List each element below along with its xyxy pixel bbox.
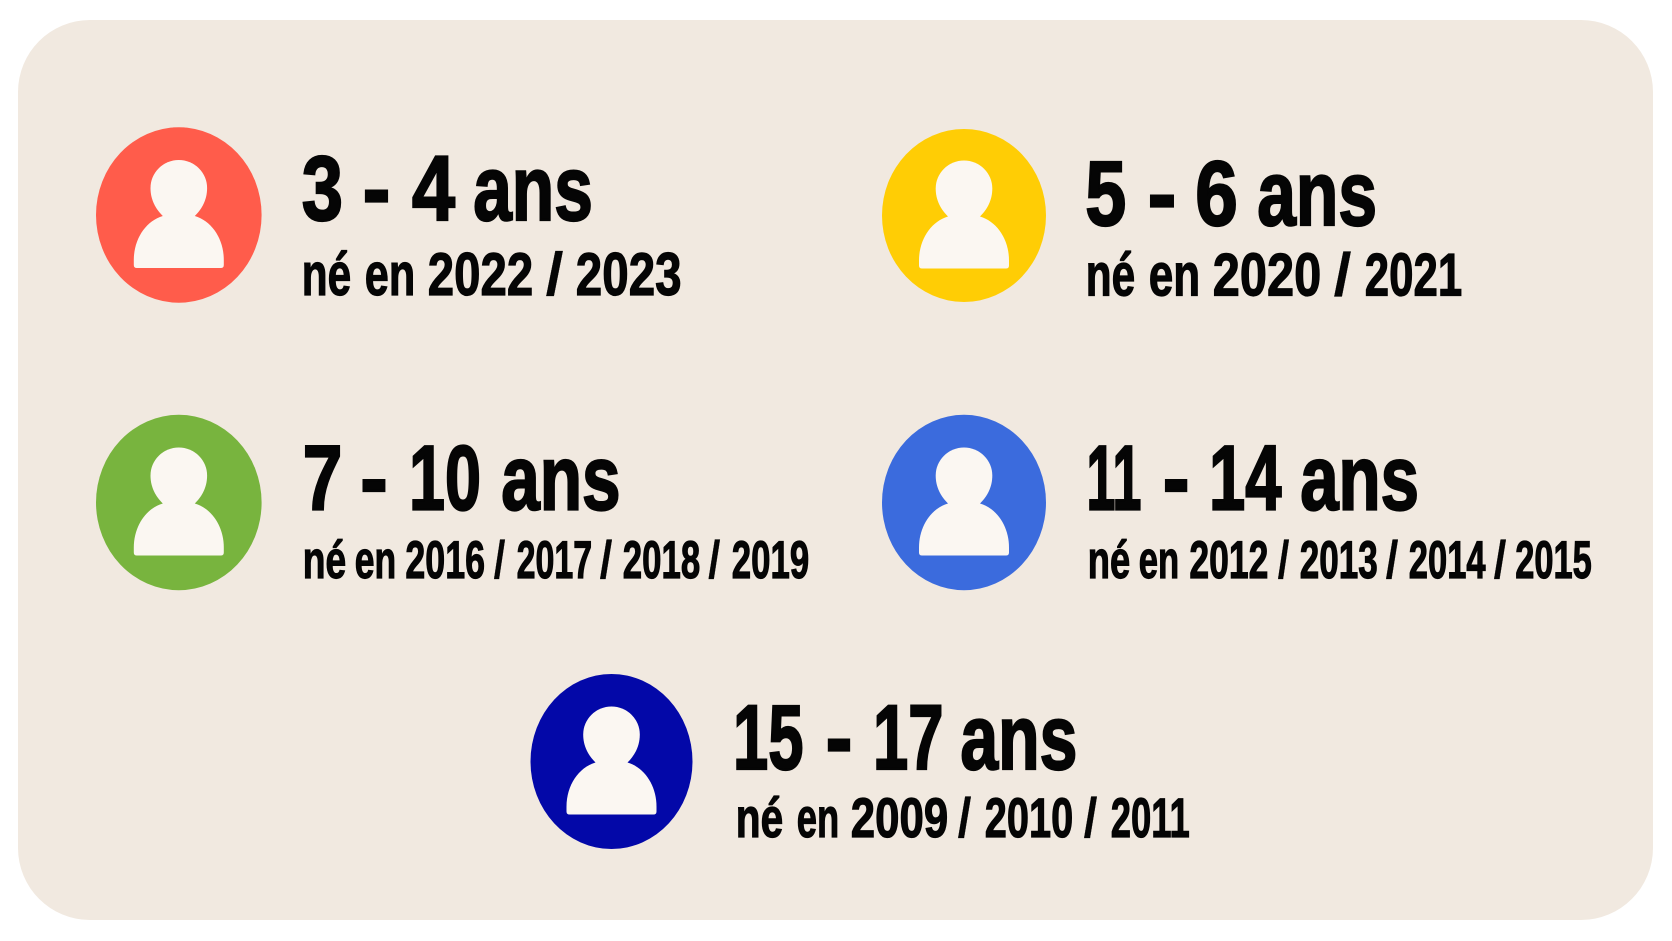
text: birth years: 2019 — [732, 531, 809, 590]
heading: age range: - — [1163, 428, 1190, 530]
heading: age range — [1085, 143, 1377, 245]
icon: navy person avatar — [530, 674, 692, 849]
text: birth years: 2015 — [1515, 531, 1592, 590]
text: birth years: en — [355, 531, 396, 590]
text: birth years: 2020 — [1213, 242, 1321, 308]
text: birth years: en — [797, 786, 839, 849]
icon: red person avatar — [96, 127, 262, 303]
text: birth years: en — [1139, 531, 1179, 590]
text: birth years: 2010 — [985, 786, 1073, 849]
heading: age range: 4 — [412, 138, 455, 240]
text: birth years: 2013 — [1300, 531, 1378, 590]
heading: age range: ans — [1300, 428, 1419, 530]
icon: green person avatar — [96, 415, 262, 590]
text: birth years: / — [708, 531, 721, 590]
text: birth years — [736, 786, 1190, 849]
text: birth years: / — [546, 241, 564, 308]
text: birth years: / — [1278, 531, 1290, 590]
heading: age range: 7 — [303, 428, 342, 530]
text: birth years: 2016 — [405, 531, 485, 590]
icon: blue person avatar — [882, 415, 1046, 590]
group: 7 - 10 ans — [96, 415, 809, 590]
text: birth years — [1086, 242, 1462, 308]
heading: age range: ans — [960, 687, 1077, 789]
heading: age range: ans — [473, 138, 593, 240]
text: birth years: / — [1494, 531, 1507, 590]
text: birth years: / — [600, 531, 613, 590]
heading: age range — [302, 138, 593, 240]
heading: age range: 17 — [873, 687, 944, 789]
text: birth years: 2018 — [623, 531, 700, 590]
group: 15 - 17 ans — [530, 674, 1190, 849]
heading: age range: - — [826, 687, 852, 789]
heading: age range: ans — [501, 428, 621, 530]
heading: age range: - — [360, 428, 388, 530]
heading: age range: 3 — [302, 138, 343, 240]
heading: age range: 14 — [1209, 428, 1282, 530]
heading: age range: - — [1148, 143, 1176, 245]
heading: age range: 5 — [1085, 143, 1126, 245]
heading: age range: 10 — [409, 428, 481, 530]
text: birth years: né — [736, 786, 783, 849]
heading: age range: 15 — [733, 687, 804, 789]
text: birth years: né — [302, 241, 351, 308]
heading: age range: ans — [1257, 143, 1377, 245]
heading: age range: 6 — [1195, 143, 1238, 245]
text: birth years: né — [1088, 531, 1130, 590]
heading: age range: - — [363, 138, 390, 240]
text: birth years: 2009 — [851, 786, 948, 849]
text: birth years: 2017 — [517, 531, 592, 590]
text: birth years: / — [494, 531, 506, 590]
group: 11 - 14 ans — [882, 415, 1592, 590]
heading: age range — [303, 428, 621, 530]
text: birth years: / — [1084, 786, 1098, 849]
group: 5 - 6 ans — [882, 129, 1462, 308]
text: birth years: / — [1334, 242, 1352, 308]
text: birth years: / — [1386, 531, 1399, 590]
text: birth years: 2023 — [576, 241, 682, 308]
text: birth years: / — [958, 786, 972, 849]
text: birth years: en — [365, 241, 415, 308]
heading: age range: 11 — [1086, 428, 1142, 530]
text: birth years: 2022 — [428, 241, 533, 308]
icon: yellow person avatar — [882, 129, 1046, 302]
heading: age range — [733, 687, 1077, 789]
text: birth years: né — [303, 531, 346, 590]
text: birth years: 2012 — [1189, 531, 1268, 590]
text: birth years — [303, 531, 809, 590]
text: birth years — [1088, 531, 1592, 590]
heading: age range — [1086, 428, 1419, 530]
text: birth years: 2011 — [1111, 786, 1190, 849]
text: birth years — [302, 241, 682, 308]
text: birth years: en — [1149, 242, 1200, 308]
text: birth years: 2014 — [1409, 531, 1486, 590]
text: birth years: né — [1086, 242, 1135, 308]
group: 3 - 4 ans — [96, 127, 682, 308]
text: birth years: 2021 — [1365, 242, 1462, 308]
